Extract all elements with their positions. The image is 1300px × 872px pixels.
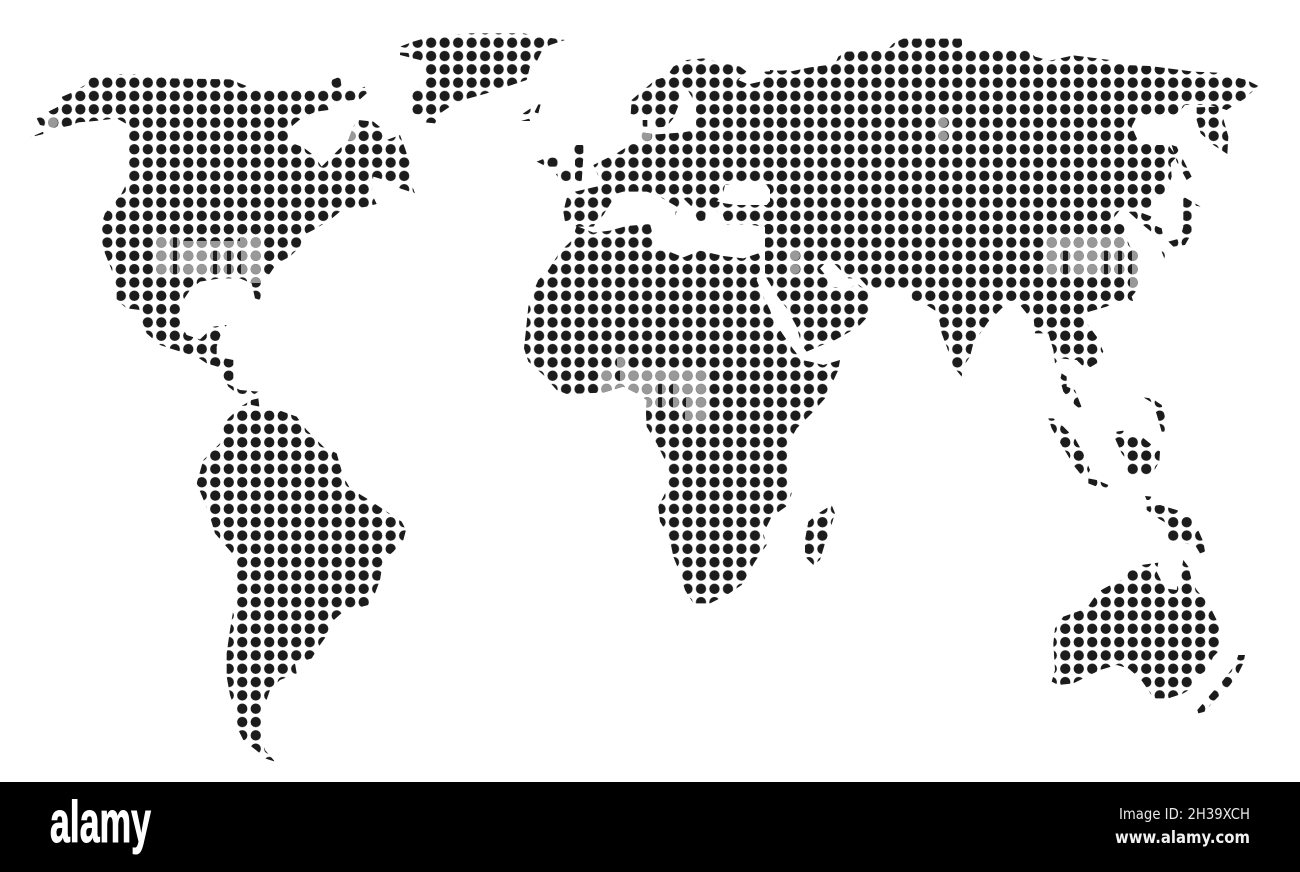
logo: alamy: alamy (50, 790, 151, 855)
image id: Image ID: 2H39XCH (1119, 805, 1250, 823)
website: www.alamy.com (1115, 828, 1250, 847)
islands: Indonesia, Philippines and New Guinea (1048, 373, 1205, 554)
continent: Africa and Madagascar (520, 222, 840, 607)
continent: North America (30, 74, 415, 394)
continent: Australia and New Zealand (1050, 555, 1250, 715)
continent: Europe (536, 58, 788, 227)
continent: Asia (765, 35, 1265, 380)
footer band (0, 782, 1300, 872)
landmass: Greenland and Arctic islands (400, 33, 565, 124)
continent: South America (190, 395, 415, 765)
